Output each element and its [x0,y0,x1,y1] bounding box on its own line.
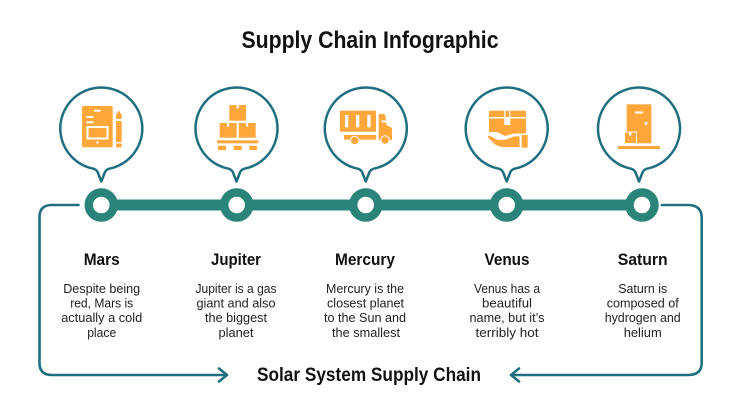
speech bubble: Jupiter [195,87,277,182]
text: Mars description: actually a cold [61,310,142,325]
text: Jupiter description: Jupiter is a gas [196,281,277,296]
speech bubble: Saturn [598,87,680,182]
text: Mars description: Despite being [63,281,140,296]
heading: Mars: Mars [84,251,120,269]
text: Mercury description: closest planet [327,296,404,310]
speech bubble: Mercury [325,87,407,182]
text: Mars description: red, Mars is [70,296,134,310]
subtitle: Solar System Supply Chain: Solar System Supply Chain [257,365,481,386]
icon: parcel at door [618,104,660,149]
text: Saturn description: composed of [607,296,679,310]
speech bubble: Mars [60,87,142,182]
text: Jupiter description: the biggest [205,310,267,325]
text: Mercury description: Mercury is the [326,281,404,296]
speech bubble: Venus [466,87,548,182]
text: Saturn description: hydrogen and [605,310,681,325]
text: Mercury description [324,281,406,340]
text: Saturn description: Saturn is [618,281,668,296]
panel: Venus [466,87,548,340]
text: Jupiter description: giant and also [196,296,276,310]
text: Venus description [470,281,545,340]
text: Saturn description: helium [624,325,662,340]
text: Saturn description [605,281,681,340]
title: Supply Chain Infographic [242,27,498,54]
icon: delivery truck [340,111,392,145]
text: Mars description: place [87,325,116,340]
text: Jupiter description [196,281,277,340]
heading: Saturn: Saturn [618,251,668,269]
icon: boxes on pallet [217,105,258,150]
heading: Venus: Venus [484,251,530,269]
icon: parcel on hand [487,111,528,148]
panel: Mars [60,87,142,340]
right connector arrow [511,205,702,382]
left connector arrow [40,205,227,382]
text: Mercury description: to the Sun and [324,310,406,325]
text: Mars description [61,281,142,340]
text: Venus description: name, but it’s [470,310,545,325]
text: Jupiter description: planet [218,325,254,340]
heading: Mercury: Mercury [335,251,396,269]
panel: Saturn [598,87,681,340]
icon: tablet and pencil [82,106,122,147]
text: Venus description: beautiful [482,296,532,310]
text: Venus description: terribly hot [476,325,539,340]
panel: Mercury [324,87,407,340]
heading: Jupiter: Jupiter [211,251,262,269]
text: Mercury description: the smallest [332,325,400,340]
timeline nodes [89,192,655,218]
timeline track [101,200,642,210]
panel: Jupiter [195,87,277,340]
text: Venus description: Venus has a [474,281,541,296]
